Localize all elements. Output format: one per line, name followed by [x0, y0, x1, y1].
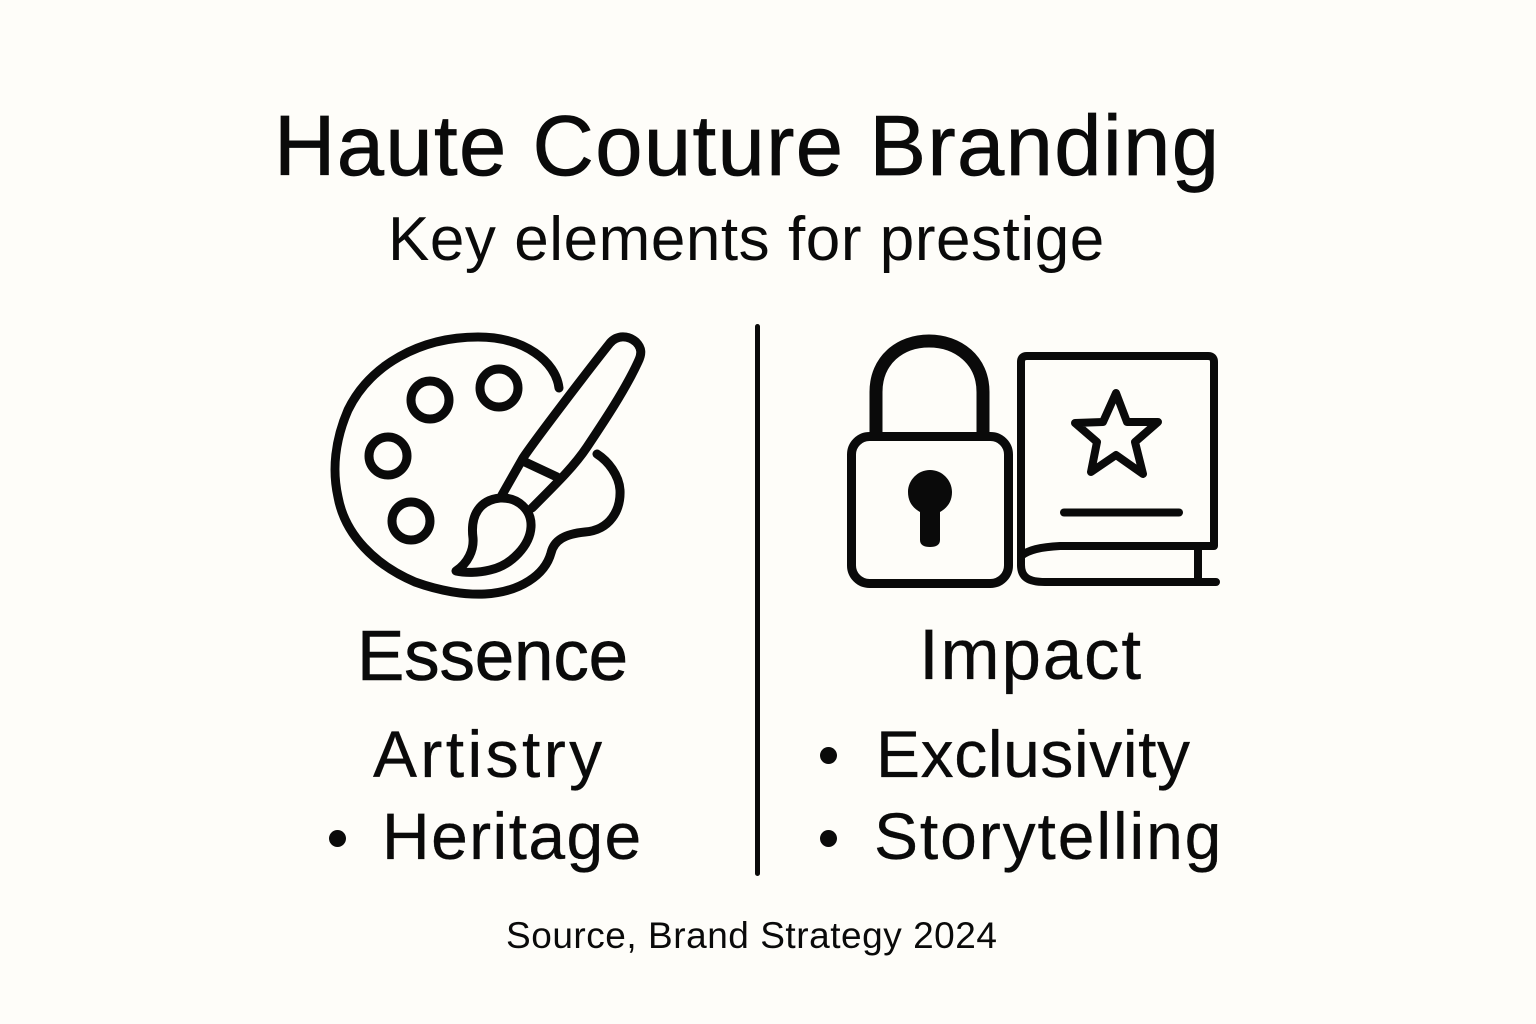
heading: Essence: Essence	[357, 617, 628, 696]
divider	[755, 324, 760, 876]
heading: Impact: Impact	[919, 616, 1143, 695]
bullet	[820, 830, 837, 847]
list item: Storytelling: Storytelling	[874, 799, 1223, 873]
list item: Exclusivity: Exclusivity	[876, 717, 1191, 791]
bullet	[329, 830, 346, 847]
title: Haute Couture Branding	[274, 99, 1220, 194]
list item: Artistry: Artistry	[373, 717, 606, 791]
bullet	[820, 747, 837, 764]
subtitle: Key elements for prestige	[388, 205, 1105, 274]
source note: Source, Brand Strategy 2024	[506, 915, 998, 956]
list item: Heritage: Heritage	[382, 799, 643, 873]
